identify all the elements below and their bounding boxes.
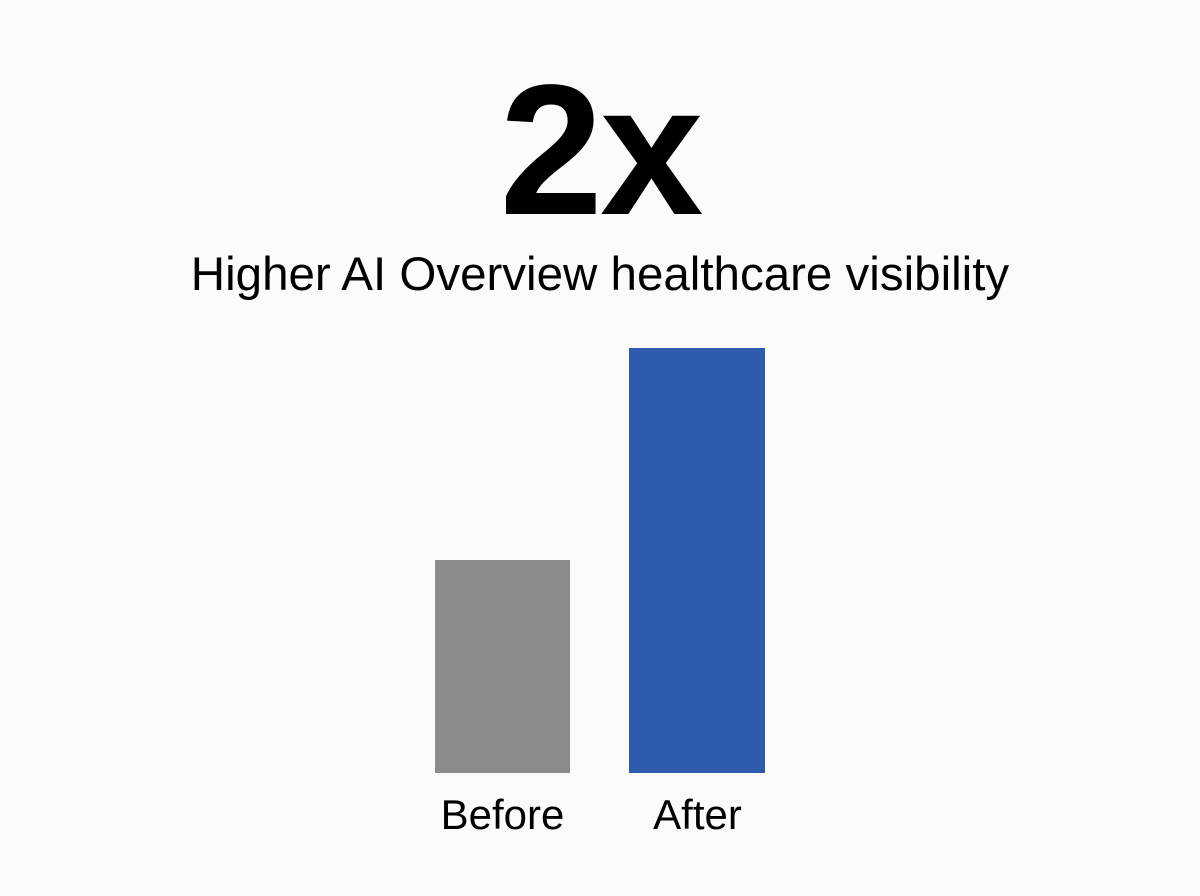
label: after: After bbox=[653, 791, 742, 838]
headline: 2x: 2x bbox=[500, 47, 700, 254]
label: before: Before bbox=[441, 791, 564, 838]
bar: after bbox=[629, 348, 765, 773]
subtitle: Higher AI Overview healthcare visibility bbox=[191, 248, 1009, 301]
bar chart bbox=[435, 348, 765, 838]
bar: before bbox=[435, 560, 570, 773]
